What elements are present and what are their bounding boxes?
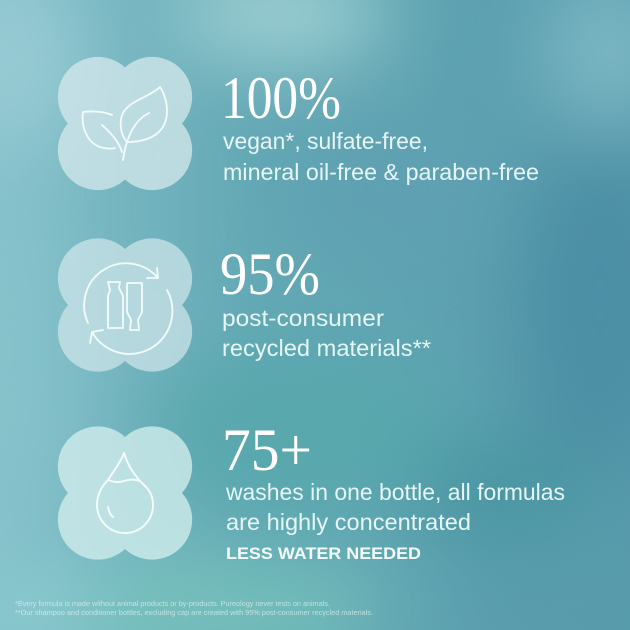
footnotes [15, 601, 373, 617]
text: concentrated formulas: are highly concentrated [226, 509, 471, 535]
text: recycled materials [222, 305, 431, 361]
text: concentrated formulas [225, 479, 565, 535]
text: vegan claims: vegan*, sulfate-free, [223, 128, 428, 154]
footnotes: *Every formula is made without animal products or by-products. Pureology never tests on animals. [15, 601, 330, 608]
panel: recycled [58, 238, 431, 372]
stat: 100%: 100% [221, 65, 341, 131]
icon: water drop [97, 453, 153, 533]
panel: vegan [58, 57, 539, 190]
text: vegan claims: mineral oil-free & paraben-free [223, 159, 539, 185]
clover badge 2 [58, 238, 192, 372]
text: vegan claims [223, 128, 539, 185]
icon: leaves [83, 87, 167, 160]
text: less water needed: LESS WATER NEEDED [226, 544, 421, 563]
text: recycled materials: recycled materials** [222, 335, 431, 361]
panel: concentrated [58, 417, 565, 563]
text: concentrated formulas: washes in one bottle, all formulas [225, 479, 565, 505]
stat: 75+: 75+ [222, 417, 312, 483]
stat: 95%: 95% [220, 241, 320, 307]
footnotes: **Our shampoo and conditioner bottles, excluding cap are created with 95% post-consumer recycled materials. [15, 610, 373, 617]
clover badge 1 [58, 57, 192, 190]
clover badge 3 [58, 426, 192, 560]
text: recycled materials: post-consumer [222, 305, 384, 331]
icon: recycling bottles [84, 263, 172, 354]
